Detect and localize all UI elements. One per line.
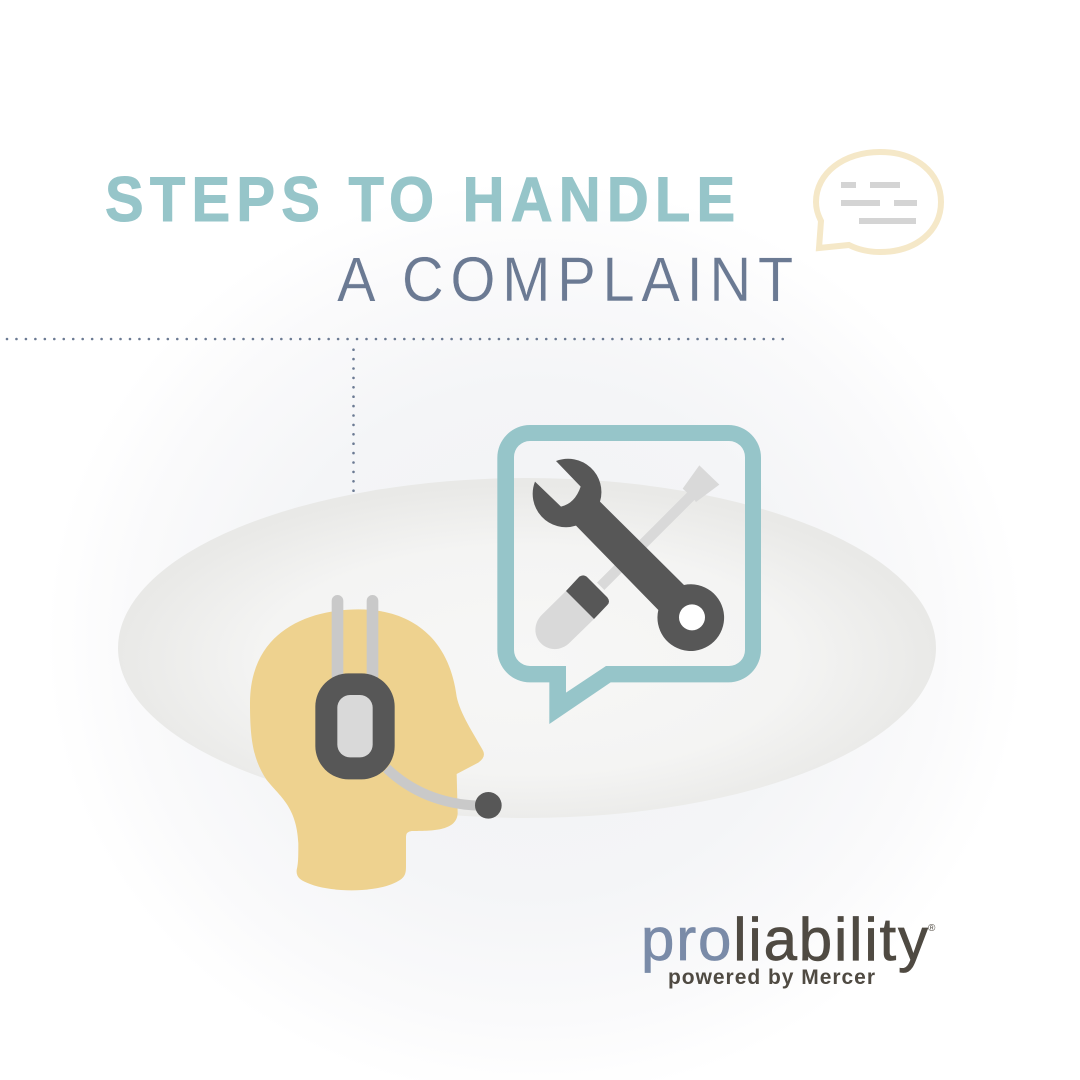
logo	[641, 906, 936, 989]
screwdriver	[535, 465, 719, 649]
icon: tools speech bubble	[497, 425, 761, 724]
title: a complaint: A COMPLAINT	[337, 244, 793, 315]
headband	[332, 595, 378, 682]
title: steps to handle: STEPS TO HANDLE	[105, 164, 735, 235]
microphone	[475, 792, 502, 819]
bubble outline	[497, 425, 761, 724]
logo tagline: powered by Mercer	[668, 966, 875, 989]
ear cup	[315, 673, 395, 779]
icon: small speech bubble	[816, 152, 941, 252]
logo wordmark: proliability	[641, 906, 928, 973]
registered mark: ®	[928, 923, 936, 934]
elliptical disc	[118, 478, 936, 818]
dotted horizontal divider	[7, 338, 783, 340]
icon: head with headset	[250, 595, 502, 890]
head	[250, 609, 484, 890]
wrench	[533, 459, 724, 651]
microphone arm	[387, 768, 478, 806]
dotted vertical connector	[352, 350, 355, 491]
